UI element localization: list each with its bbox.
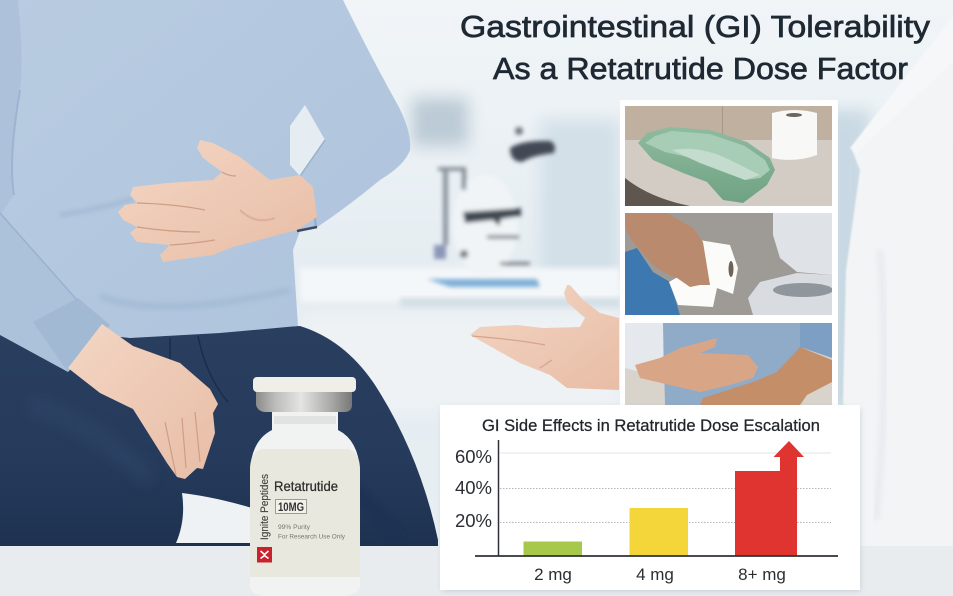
logo [257,547,272,562]
person: sweater [0,0,410,372]
x axis labels: 8+ mg [738,565,786,584]
gap between arm and torso [290,105,325,176]
dose box: 10MG [278,502,304,514]
x axis labels: 2 mg [534,565,572,584]
bar chart panel [440,405,860,591]
hand on stomach [118,140,317,262]
microscope [427,127,555,287]
brand name: Ignite Peptides [259,474,271,540]
y axis labels: 60% [455,446,492,467]
bar: 8+ mg with rising arrow [735,441,804,556]
photo collage [620,100,838,405]
title: As a Retatrutide Dose Factor [493,51,908,86]
gridlines [500,453,831,522]
photo: kidney basin and toilet roll [625,106,832,206]
y axis labels: 20% [455,510,492,531]
title [460,9,931,86]
x axis labels: 4 mg [636,565,674,584]
product name: Retatrutide [274,478,338,494]
floor surface [0,546,953,596]
stool cushion [176,493,252,543]
doctor in white coat [843,16,953,576]
vial label [250,449,360,577]
purity text: For Research Use Only [278,534,346,540]
axes [475,440,838,556]
hand on thigh [68,324,218,479]
person: jeans [0,326,438,546]
x axis labels [534,565,786,584]
chart title: GI Side Effects in Retatrutide Dose Escalation [482,417,820,435]
bar: 2 mg [524,542,582,556]
bar: 4 mg [630,508,688,556]
photo: hands on stomach [625,323,832,405]
vial crimp [256,392,352,412]
vial cap [253,377,356,392]
product vial [250,377,360,596]
purity text [278,524,346,540]
y axis labels [455,446,492,531]
purity text: 99% Purity [278,524,311,531]
photo: hand with toilet paper [625,213,833,315]
gesturing hand [470,285,619,390]
y axis labels: 40% [455,477,492,498]
title: Gastrointestinal (GI) Tolerability [460,9,931,44]
